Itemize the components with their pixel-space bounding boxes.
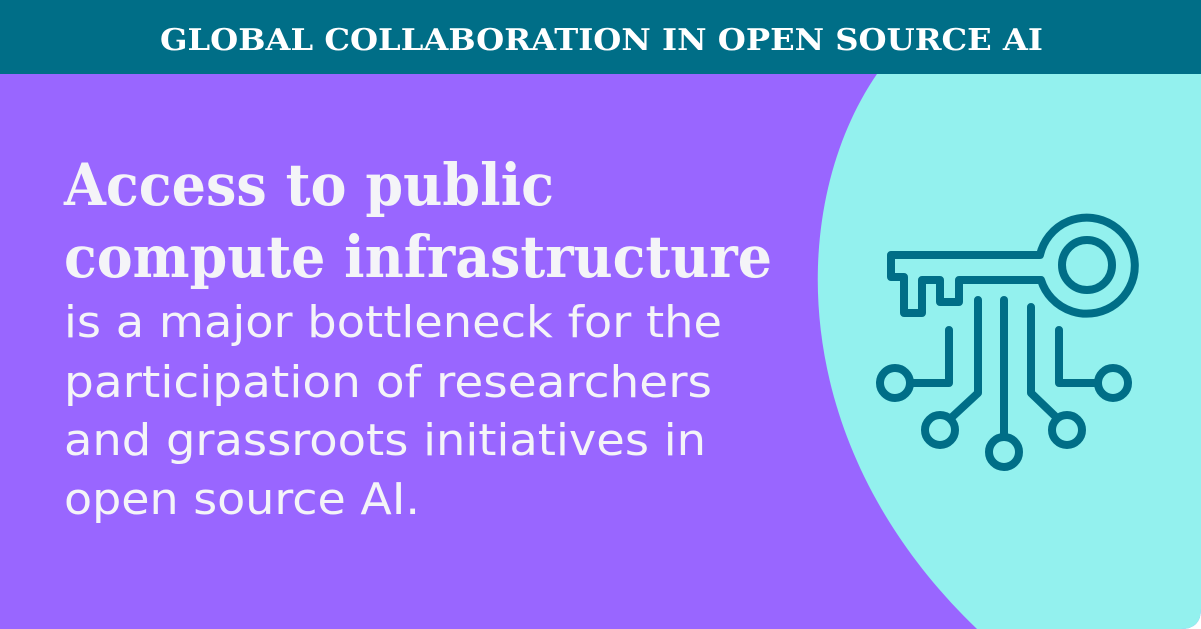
body text: participation of researchers [64, 357, 712, 408]
body text [64, 297, 722, 525]
headline: compute infrastructure [64, 223, 772, 291]
body text: and grassroots initiatives in [64, 415, 706, 466]
body text: is a major bottleneck for the [64, 297, 722, 348]
cyan curved panel [818, 74, 1201, 629]
icon: key with circuit [880, 218, 1135, 467]
title: GLOBAL COLLABORATION IN OPEN SOURCE AI [160, 23, 1043, 58]
header bar [0, 0, 1201, 74]
headline [63, 151, 772, 291]
body text: open source AI. [64, 474, 420, 525]
headline: Access to public [63, 151, 554, 219]
